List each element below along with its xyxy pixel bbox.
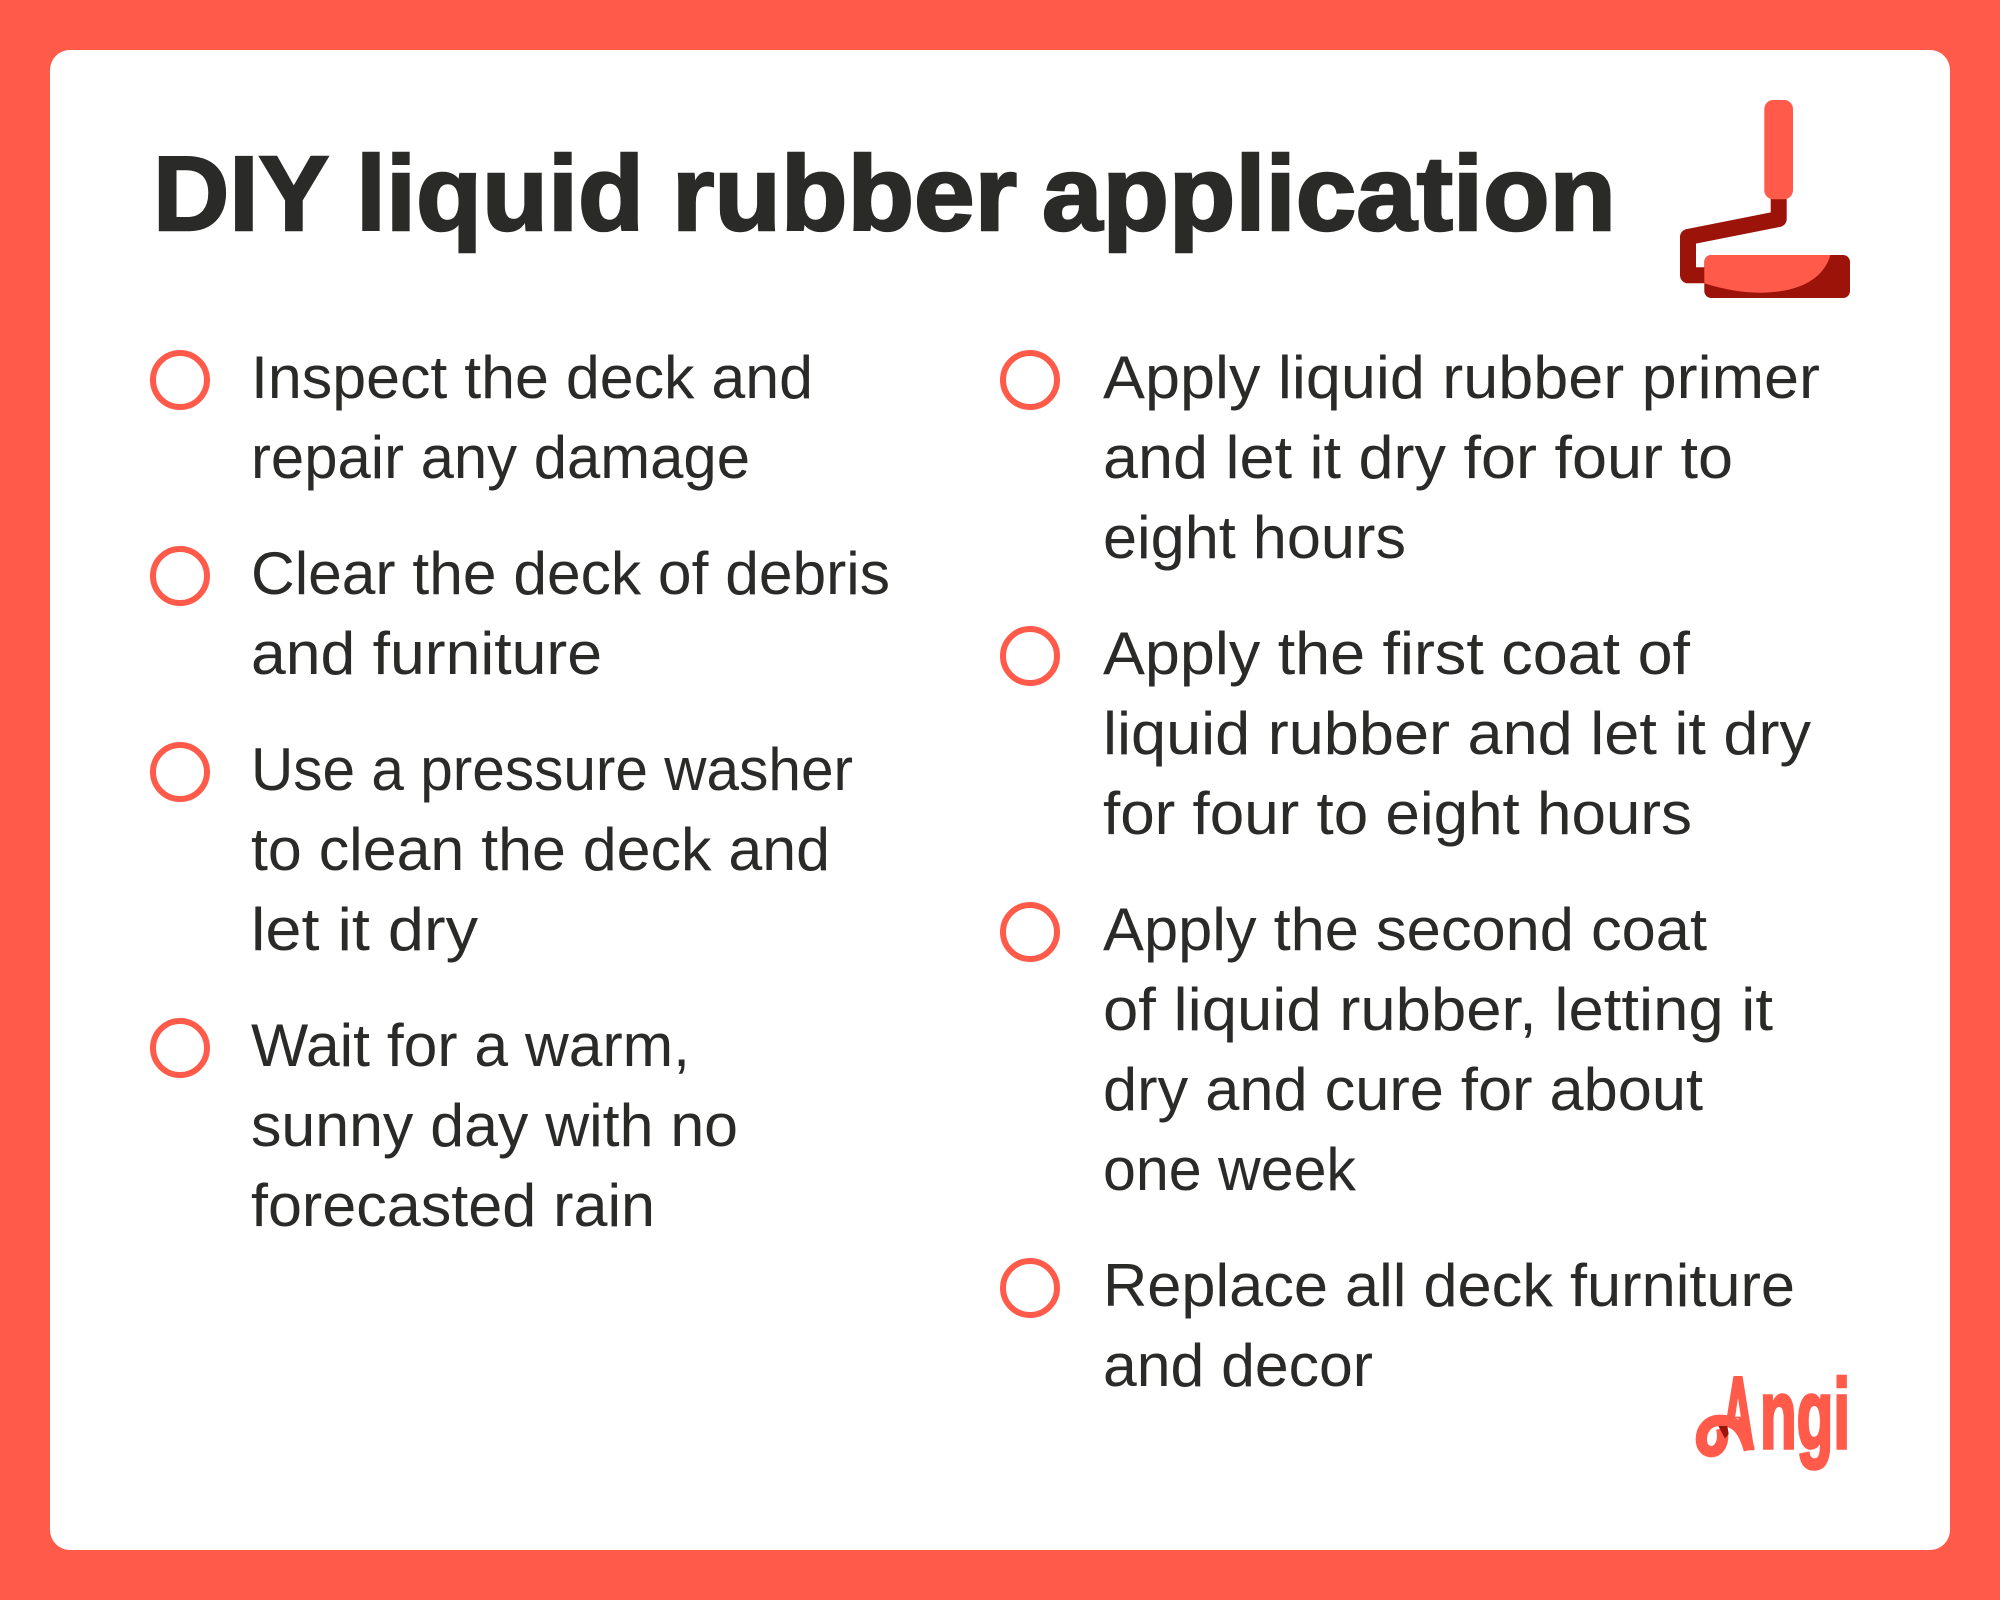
item: second coat: dry and cure for about: [1103, 1056, 1703, 1123]
item: clear the deck: [153, 540, 890, 687]
title: [153, 135, 1616, 253]
title: liquid: [356, 135, 644, 253]
item: inspect the deck: Inspect the deck and: [251, 344, 813, 411]
item: second coat: [1003, 896, 1773, 1203]
item: apply primer: Apply liquid rubber primer: [1103, 344, 1820, 411]
logo: Angi: A: [1722, 1358, 1754, 1470]
icon: paint roller: [1688, 100, 1850, 298]
item: second coat: Apply the second coat: [1103, 896, 1707, 963]
item: apply primer: and let it dry for four to: [1103, 424, 1733, 491]
item: inspect the deck: [153, 344, 813, 491]
item: wait for warm day: Wait for a warm,: [251, 1012, 690, 1079]
title: DIY: [153, 135, 329, 253]
title: rubber: [672, 135, 1017, 253]
title: application: [1042, 135, 1616, 253]
item: wait for warm day: [153, 1012, 738, 1239]
item: first coat: liquid rubber and let it dry: [1103, 700, 1811, 767]
item: pressure washer: [153, 736, 853, 963]
item: inspect the deck: repair any damage: [251, 424, 750, 491]
item: first coat: Apply the first coat of: [1103, 620, 1690, 687]
item: pressure washer: to clean the deck and: [251, 816, 830, 883]
item: first coat: [1003, 620, 1811, 847]
item: wait for warm day: forecasted rain: [251, 1172, 655, 1239]
item: pressure washer: Use a pressure washer: [251, 736, 853, 803]
logo: Angi: [1701, 1358, 1850, 1470]
item: replace furniture: and decor: [1103, 1332, 1373, 1399]
item: pressure washer: let it dry: [251, 896, 478, 963]
item: replace furniture: [1003, 1252, 1795, 1399]
item: replace furniture: Replace all deck furniture: [1103, 1252, 1795, 1319]
item: apply primer: [1003, 344, 1820, 571]
item: clear the deck: Clear the deck of debris: [251, 540, 890, 607]
item: apply primer: eight hours: [1103, 504, 1406, 571]
item: second coat: of liquid rubber, letting it: [1103, 976, 1773, 1043]
right checklist column: [1003, 344, 1820, 1399]
item: clear the deck: and furniture: [251, 620, 602, 687]
item: first coat: for four to eight hours: [1103, 780, 1692, 847]
item: wait for warm day: sunny day with no: [251, 1092, 738, 1159]
left checklist column: [153, 344, 890, 1239]
logo: Angi: ngi: [1760, 1359, 1850, 1469]
item: second coat: one week: [1103, 1136, 1357, 1203]
